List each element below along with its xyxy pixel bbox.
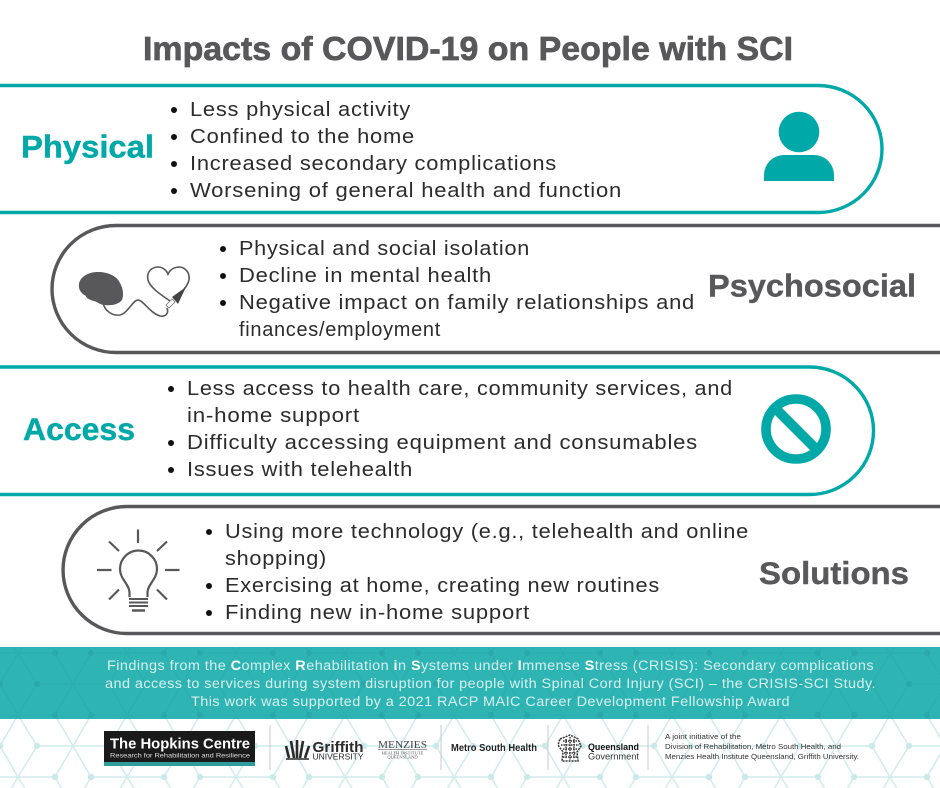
icon: brain plugged into heart bbox=[79, 267, 189, 316]
panel: physical bbox=[0, 86, 882, 212]
solutions bullet list bbox=[206, 521, 749, 624]
icon: light bulb bbox=[97, 530, 180, 610]
access bullet list: Issues with telehealth bbox=[187, 459, 413, 481]
solutions bullet list: Finding new in-home support bbox=[225, 602, 530, 624]
joint initiative statement bbox=[665, 732, 859, 761]
physical bullet list: Confined to the home bbox=[190, 126, 415, 148]
logo: Menzies: QUEENSLAND bbox=[387, 754, 418, 760]
citation text: and access to services during system disruption for people with Spinal Cord Injury (SCI) – the CRISIS-SCI Study. bbox=[105, 676, 876, 691]
icon: prohibited sign bbox=[766, 399, 826, 459]
physical panel outline bbox=[0, 86, 882, 212]
physical heading: Physical bbox=[21, 128, 154, 164]
icon: person bbox=[764, 112, 834, 181]
logo: The Hopkins Centre bbox=[104, 731, 255, 766]
logo: Menzies bbox=[378, 739, 427, 760]
title: Impacts of COVID-19 on People with SCI bbox=[143, 30, 793, 67]
logo: Griffith University: Griffith bbox=[312, 739, 364, 756]
access bullet list bbox=[168, 378, 733, 481]
joint initiative statement: A joint initiative of the bbox=[665, 732, 741, 741]
psychosocial heading: Psychosocial bbox=[708, 268, 916, 304]
access bullet list: in-home support bbox=[187, 405, 360, 427]
solutions bullet list: Exercising at home, creating new routines bbox=[225, 575, 660, 597]
solutions bullet list: Using more technology (e.g., telehealth and online bbox=[225, 521, 749, 543]
panel: psychosocial bbox=[52, 226, 940, 352]
logo: The Hopkins Centre: The Hopkins Centre bbox=[110, 736, 250, 752]
logo dividers bbox=[270, 725, 648, 770]
solutions heading: Solutions bbox=[759, 555, 909, 591]
logo: The Hopkins Centre: Research for Rehabilitation and Resilience bbox=[110, 752, 250, 760]
psychosocial bullet list: Negative impact on family relationships and bbox=[239, 292, 695, 314]
psychosocial panel outline bbox=[52, 226, 940, 352]
psychosocial bullet list bbox=[220, 238, 695, 341]
logo: Metro South Health: Metro South Health bbox=[451, 743, 537, 754]
access heading: Access bbox=[23, 411, 135, 447]
physical bullet list bbox=[171, 99, 622, 202]
citation text: This work was supported by a 2021 RACP MAIC Career Development Fellowship Award bbox=[191, 694, 790, 709]
crest bbox=[558, 735, 581, 761]
psychosocial bullet list: finances/employment bbox=[239, 319, 441, 341]
physical bullet list: Increased secondary complications bbox=[190, 153, 557, 175]
logo: Queensland Government bbox=[558, 735, 639, 762]
psychosocial bullet list: Physical and social isolation bbox=[239, 238, 530, 260]
citation text bbox=[105, 658, 876, 709]
access bullet list: Less access to health care, community services, and bbox=[187, 378, 733, 400]
logo: Menzies: HEALTH INSTITUTE bbox=[382, 750, 424, 756]
panel: access bbox=[0, 367, 874, 495]
teal citation band bbox=[0, 647, 940, 719]
solutions panel outline bbox=[63, 506, 940, 634]
joint initiative statement: Menzies Health Institute Queensland, Griffith University. bbox=[665, 752, 859, 761]
physical bullet list: Less physical activity bbox=[190, 99, 411, 121]
logo: Queensland Government: Queensland bbox=[588, 742, 639, 753]
access bullet list: Difficulty accessing equipment and consumables bbox=[187, 432, 698, 454]
logo: Griffith University bbox=[286, 739, 364, 762]
access panel outline bbox=[0, 367, 874, 495]
citation text: Findings from the Complex Rehabilitation in Systems under Immense Stress (CRISIS): Secondary complications bbox=[107, 658, 874, 673]
solutions bullet list: shopping) bbox=[225, 548, 327, 570]
psychosocial bullet list: Decline in mental health bbox=[239, 265, 492, 287]
footer background pattern bbox=[0, 719, 940, 788]
logo: Griffith University: UNIVERSITY bbox=[312, 752, 364, 762]
logo: Menzies: MENZIES bbox=[378, 739, 427, 751]
joint initiative statement: Division of Rehabilitation, Metro South Health, and bbox=[665, 742, 841, 751]
physical bullet list: Worsening of general health and function bbox=[190, 180, 622, 202]
panel: solutions bbox=[63, 506, 940, 634]
logo: Queensland Government: Government bbox=[588, 752, 639, 762]
